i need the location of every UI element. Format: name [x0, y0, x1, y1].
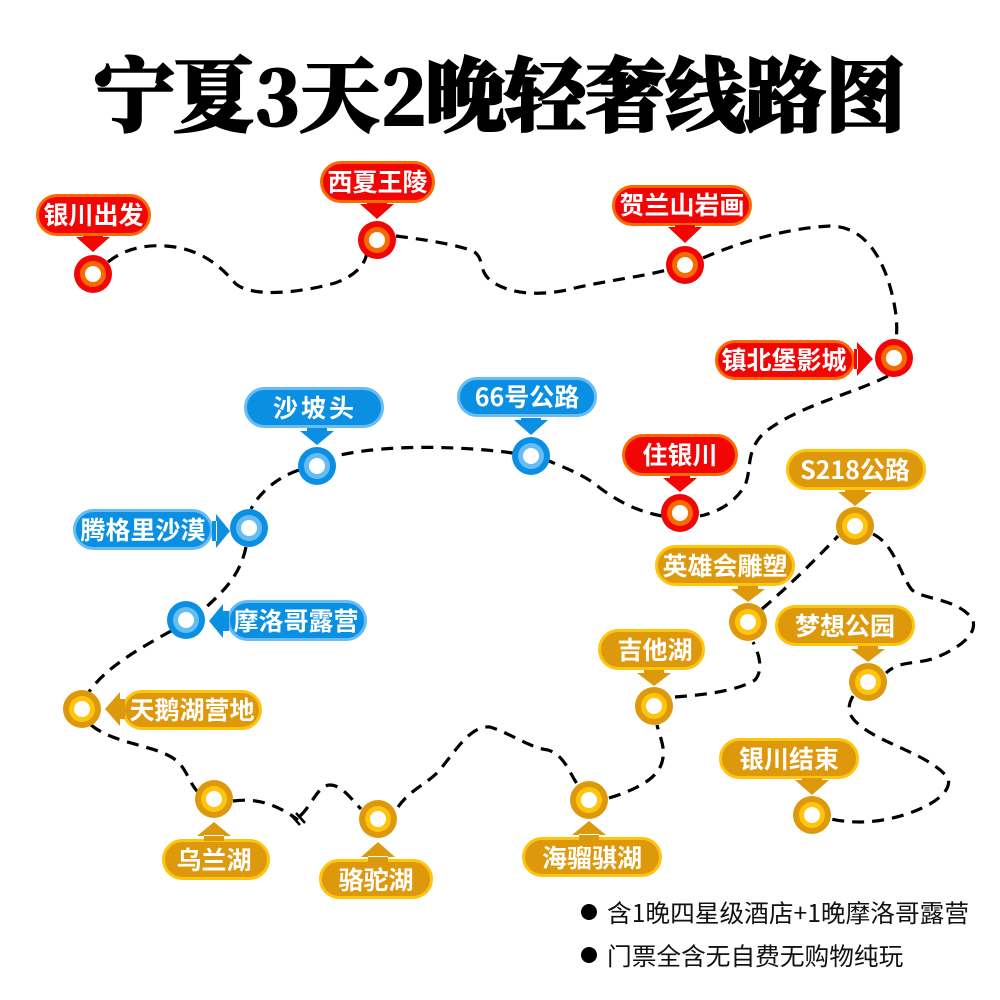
- stop: 天鹅湖营地: 天鹅湖营地: [129, 691, 255, 727]
- stop: S218公路: [788, 450, 924, 545]
- stop: 骆驼湖: 骆驼湖: [338, 861, 414, 897]
- stop: 贺兰山岩画: [614, 186, 750, 284]
- stop: 海骝骐湖: [524, 781, 660, 876]
- title: 天: [299, 33, 380, 149]
- stop: 住银川: [624, 436, 736, 532]
- stop: 沙坡头: 沙坡头: [273, 389, 357, 425]
- dashed route line: [89, 226, 974, 825]
- stop: 摩洛哥露营: 摩洛哥露营: [233, 602, 359, 638]
- stop: 英雄会雕塑: 英雄会雕塑: [662, 547, 788, 583]
- note: tickets: 门票全含无自费无购物纯玩: [607, 937, 904, 973]
- stop: 沙坡头: [246, 388, 382, 485]
- stop: 海骝骐湖: 海骝骐湖: [542, 839, 642, 875]
- stop: 乌兰湖: [164, 780, 268, 878]
- stop: 腾格里沙漠: [74, 509, 268, 548]
- stop: 乌兰湖: 乌兰湖: [176, 841, 252, 877]
- stop: 银川结束: [720, 740, 858, 834]
- stop: S218公路: S218公路: [800, 451, 910, 487]
- stop: 摩洛哥露营: [167, 601, 366, 640]
- stop: 66号公路: 66号公路: [475, 378, 579, 414]
- stop: 梦想公园: [776, 606, 914, 701]
- stop: 天鹅湖营地: [63, 690, 260, 728]
- stop: 吉他湖: [600, 630, 704, 725]
- stop: 骆驼湖: [320, 800, 432, 898]
- stop: 吉他湖: 吉他湖: [617, 631, 693, 667]
- title: 宁夏: [94, 33, 254, 149]
- title: 3: [255, 41, 300, 147]
- note: accommodation: 含1晚四星级酒店+1晚摩洛哥露营: [607, 894, 969, 930]
- stop: 66号公路: [458, 378, 596, 475]
- stop: 住银川: 住银川: [642, 436, 718, 472]
- stop: 梦想公园: 梦想公园: [795, 607, 895, 643]
- stop: 腾格里沙漠: 腾格里沙漠: [80, 511, 206, 547]
- stop: 西夏王陵: 西夏王陵: [327, 163, 428, 199]
- stop: 英雄会雕塑: [656, 546, 794, 641]
- title: 2: [381, 41, 426, 147]
- stop: 贺兰山岩画: 贺兰山岩画: [619, 186, 745, 222]
- stop: 西夏王陵: [322, 162, 434, 259]
- stop: 银川出发: 银川出发: [43, 196, 144, 232]
- stop: 银川结束: 银川结束: [739, 740, 839, 776]
- stop: 镇北堡影城: [716, 339, 913, 378]
- title: 晚轻奢线路图: [425, 33, 906, 149]
- stop: 镇北堡影城: 镇北堡影城: [721, 341, 847, 377]
- stop: 银川出发: [38, 196, 150, 293]
